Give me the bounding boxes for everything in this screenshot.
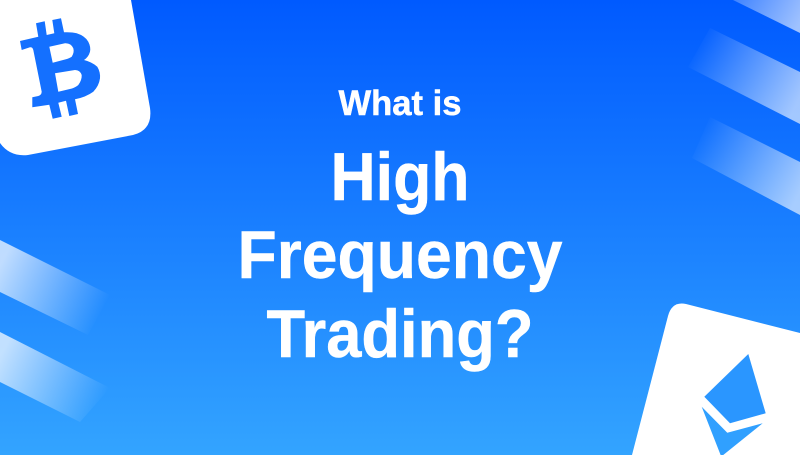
decorative stripes: bottom left: [0, 240, 110, 422]
icon: ethereum lower chevron: [702, 407, 763, 455]
icon: ethereum upper diamond: [704, 354, 766, 423]
subtitle: What is: What is: [338, 84, 462, 123]
heading line: High: High: [330, 139, 470, 215]
title: [238, 84, 563, 372]
decorative stripes: top right: [688, 0, 800, 215]
heading line: Trading?: Trading?: [266, 296, 534, 372]
ethereum card: [632, 304, 800, 455]
icon: bitcoin symbol: [20, 18, 100, 119]
card background: [0, 0, 150, 155]
card background: [632, 304, 800, 455]
bitcoin card: [0, 0, 150, 155]
heading line: Frequency: Frequency: [238, 217, 563, 293]
